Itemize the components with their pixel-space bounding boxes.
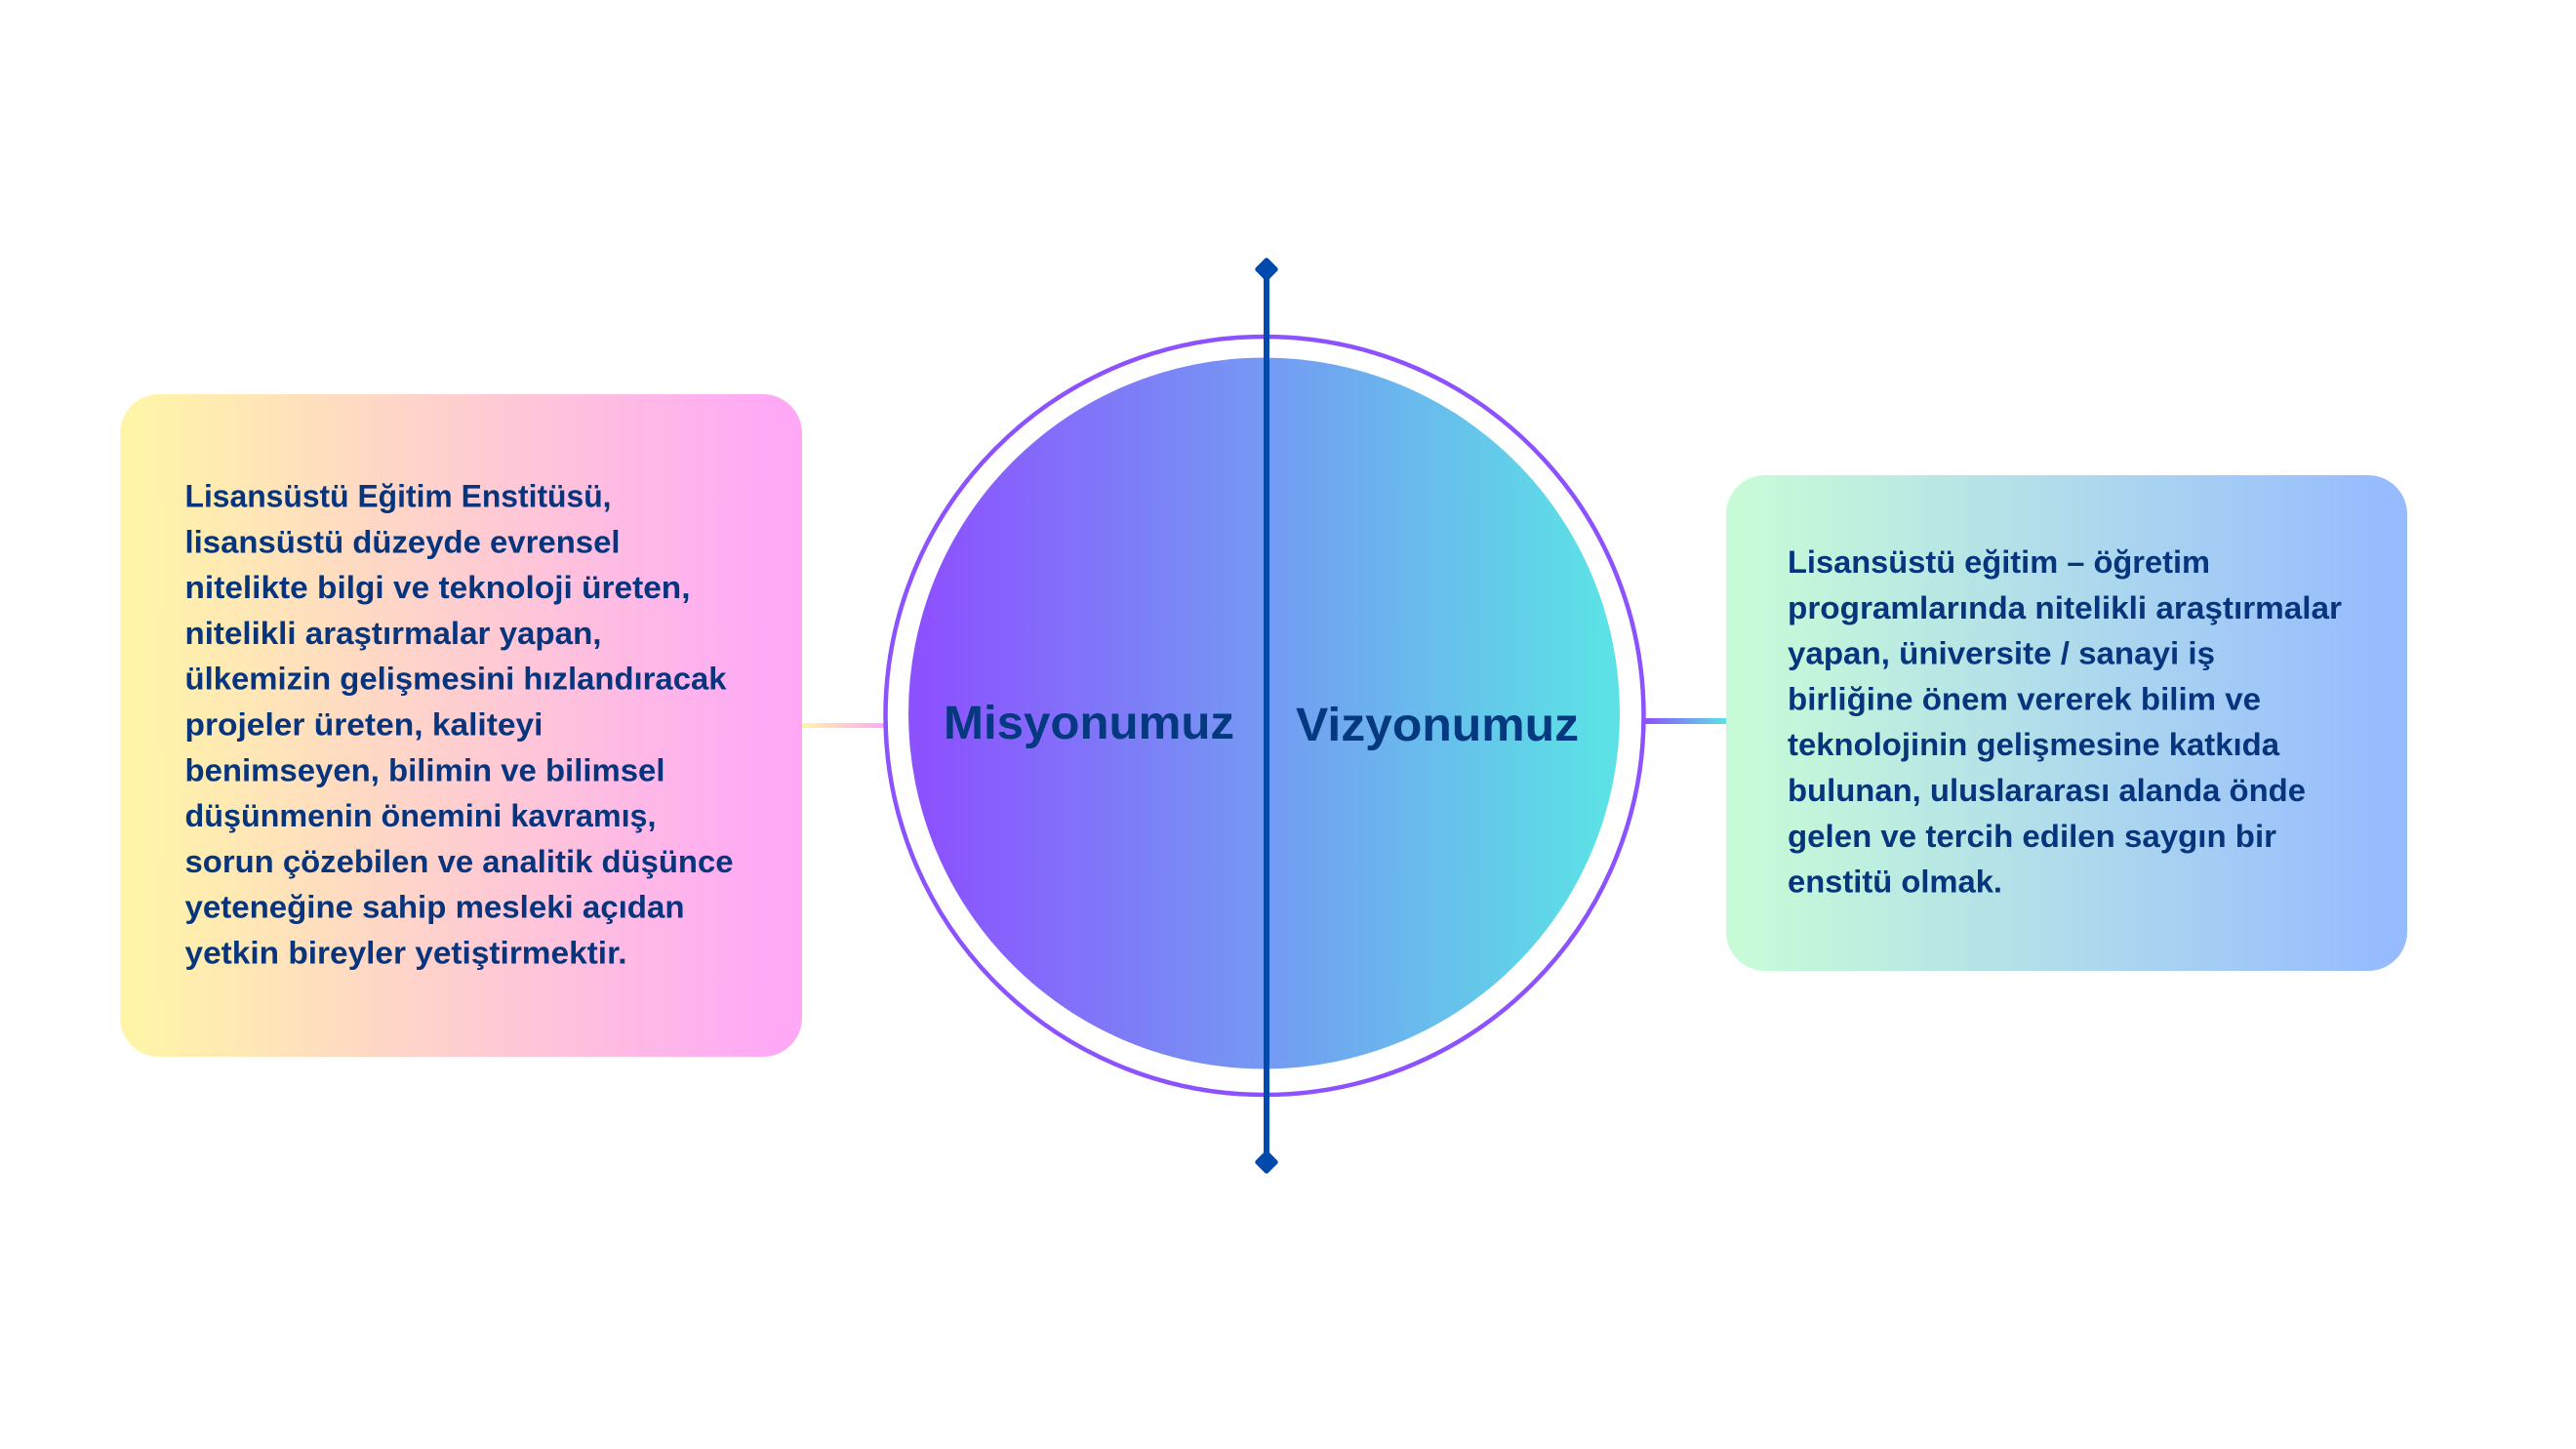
central gradient circle — [908, 357, 1620, 1069]
text block: mission: Lisansüstü Eğitim Enstitüsü, — [185, 478, 611, 513]
heading: Misyonumuz: Misyonumuz — [944, 698, 1234, 749]
text block: mission: sorun çözebilen ve analitik düşünce — [185, 844, 734, 879]
text block: vision: teknolojinin gelişmesine katkıda — [1788, 727, 2279, 762]
text block: vision: programlarında nitelikli araştırmalar — [1788, 590, 2342, 625]
vertical axis line with diamond ends — [1254, 257, 1279, 1175]
heading: Vizyonumuz: Vizyonumuz — [1296, 700, 1579, 751]
text block: mission: projeler üreten, kaliteyi — [185, 706, 543, 742]
text block: mission: yetkin bireyler yetiştirmektir. — [185, 935, 626, 970]
connector: right panel to circle — [1644, 718, 1726, 724]
text block: vision — [1788, 544, 2342, 900]
text block: mission: benimseyen, bilimin ve bilimsel — [185, 752, 665, 787]
text block: mission: yeteneğine sahip mesleki açıdan — [185, 890, 685, 925]
text block: vision: enstitü olmak. — [1788, 865, 2002, 900]
connector: left panel to circle — [802, 723, 885, 728]
text block: vision: birliğine önem vererek bilim ve — [1788, 681, 2261, 716]
outer ring — [886, 337, 1643, 1095]
text block: mission: nitelikte bilgi ve teknoloji üreten, — [185, 570, 691, 605]
panel: mission text — [120, 394, 802, 1057]
text block: mission: ülkemizin gelişmesini hızlandıracak — [185, 662, 727, 697]
text block: mission: düşünmenin önemini kavramış, — [185, 798, 656, 833]
text block: vision: gelen ve tercih edilen saygın bir — [1788, 819, 2276, 854]
text block: mission — [185, 478, 734, 970]
text block: vision: bulunan, uluslararası alanda önde — [1788, 773, 2306, 808]
panel: vision text — [1726, 475, 2407, 971]
text block: vision: Lisansüstü eğitim – öğretim — [1788, 544, 2210, 580]
text block: mission: nitelikli araştırmalar yapan, — [185, 616, 601, 651]
text block: mission: lisansüstü düzeyde evrensel — [185, 524, 621, 559]
text block: vision: yapan, üniversite / sanayi iş — [1788, 636, 2215, 671]
